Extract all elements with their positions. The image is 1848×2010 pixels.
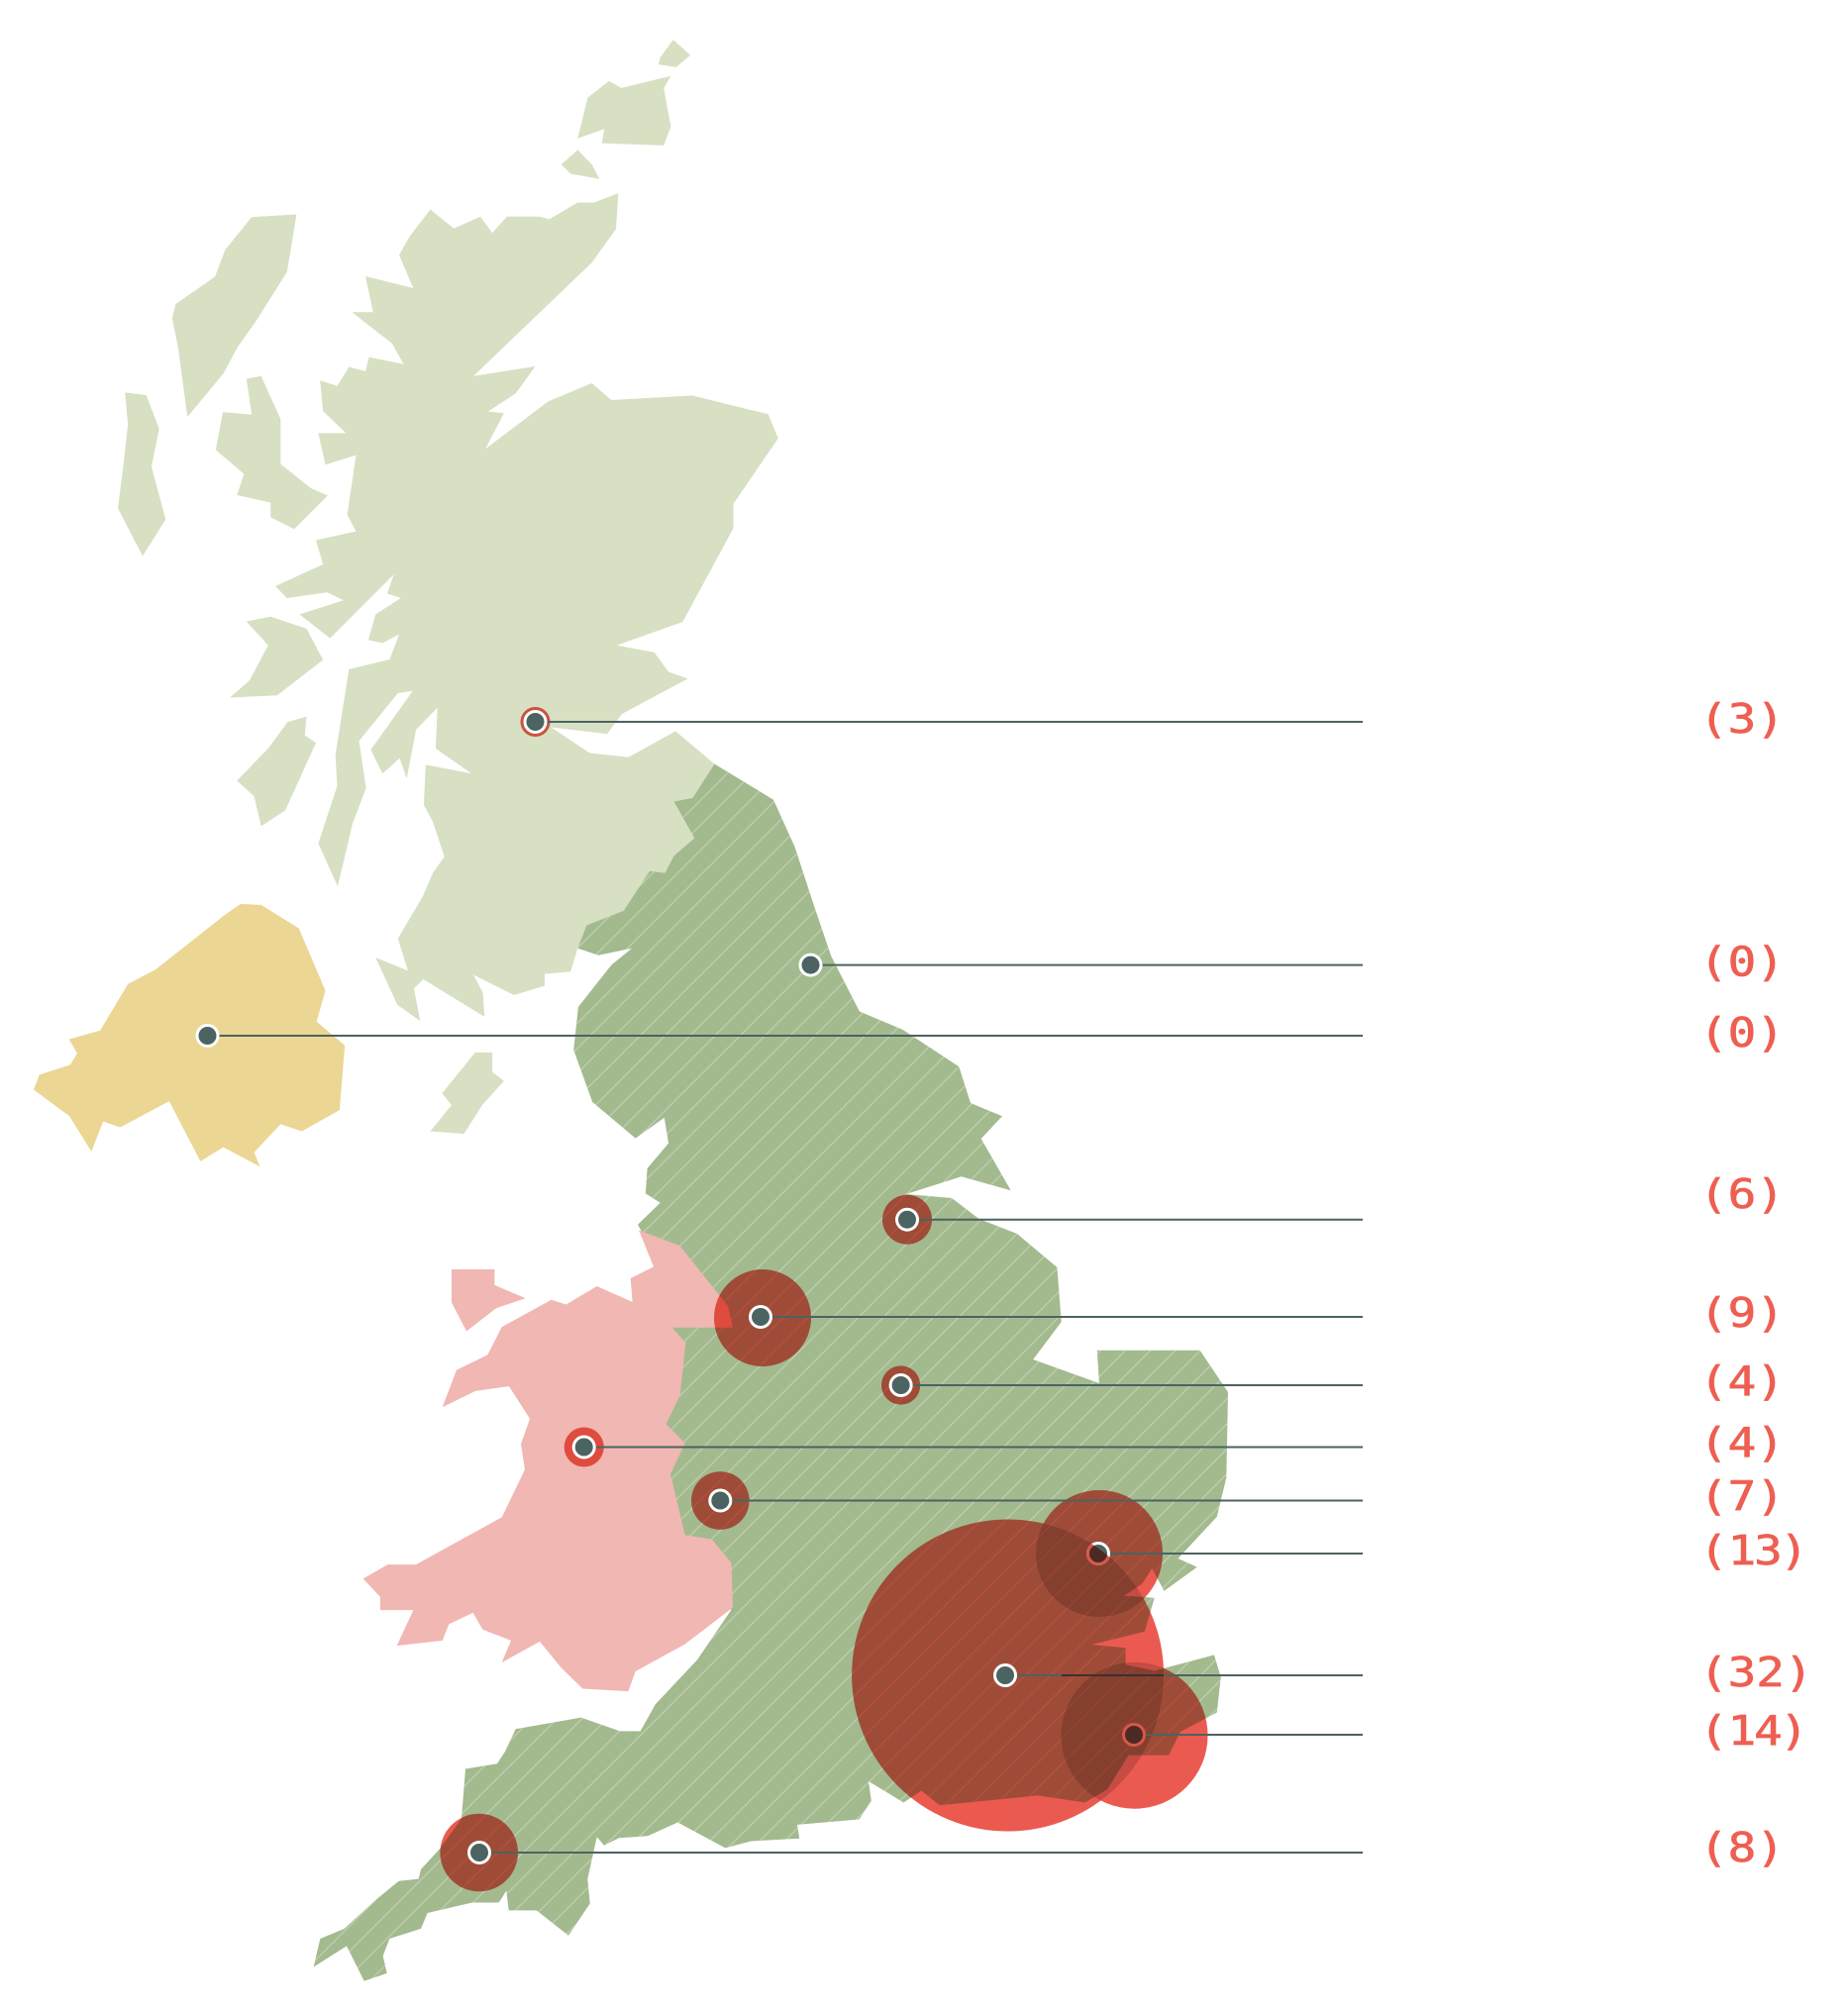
circle: Wales: [565, 1428, 604, 1467]
marker: North West: [749, 1305, 772, 1329]
marker: North East: [798, 954, 822, 977]
marker: South West: [467, 1841, 491, 1864]
circle: West Midlands: [691, 1471, 750, 1530]
marker: South East: [1122, 1723, 1146, 1747]
value labels: [1699, 696, 1813, 1871]
circle: East of England: [1036, 1490, 1163, 1617]
leader lines: [208, 722, 1363, 1853]
marker: Northern Ireland: [196, 1024, 220, 1048]
circle: North West: [714, 1269, 811, 1366]
marker: West Midlands: [708, 1489, 732, 1513]
circle: London: [852, 1519, 1164, 1832]
circle: South East: [1062, 1662, 1208, 1809]
marker: Yorkshire: [895, 1208, 919, 1232]
label: North East: (0): [1699, 940, 1785, 986]
overlap: East of England and London: [1036, 1523, 1143, 1617]
overlap: South East and London: [1062, 1661, 1164, 1800]
circle: Scotland: [521, 707, 551, 737]
label: South West: (8): [1699, 1825, 1785, 1871]
map: England (hatched): [314, 764, 1228, 1981]
label: Northern Ireland: (0): [1699, 1010, 1785, 1056]
circle: South West: [440, 1814, 518, 1891]
marker: East Midlands: [889, 1373, 913, 1397]
circle: East Midlands: [881, 1365, 920, 1405]
map: Northern Ireland: [34, 904, 345, 1166]
circle: Yorkshire: [882, 1195, 932, 1245]
label: South East: (14): [1699, 1708, 1808, 1755]
map: Wales: [363, 1230, 733, 1691]
label: Yorkshire: (6): [1699, 1171, 1785, 1218]
map: Scotland: [118, 40, 778, 1134]
marker: East of England: [1086, 1542, 1110, 1565]
label: East of England: (13): [1699, 1528, 1808, 1574]
label: London: (32): [1699, 1650, 1813, 1696]
data circles sized by count: [440, 707, 1208, 1891]
marker: Wales: [572, 1436, 596, 1459]
marker: London: [993, 1663, 1017, 1687]
location markers: [196, 710, 1146, 1864]
label: West Midlands: (7): [1699, 1473, 1785, 1520]
marker: Scotland: [523, 710, 547, 734]
label: Scotland: (3): [1699, 696, 1785, 743]
overlap shading between circles: [1036, 1523, 1164, 1800]
label: East Midlands: (4): [1699, 1358, 1785, 1405]
label: North West: (9): [1699, 1290, 1785, 1337]
label: Wales: (4): [1699, 1420, 1785, 1466]
